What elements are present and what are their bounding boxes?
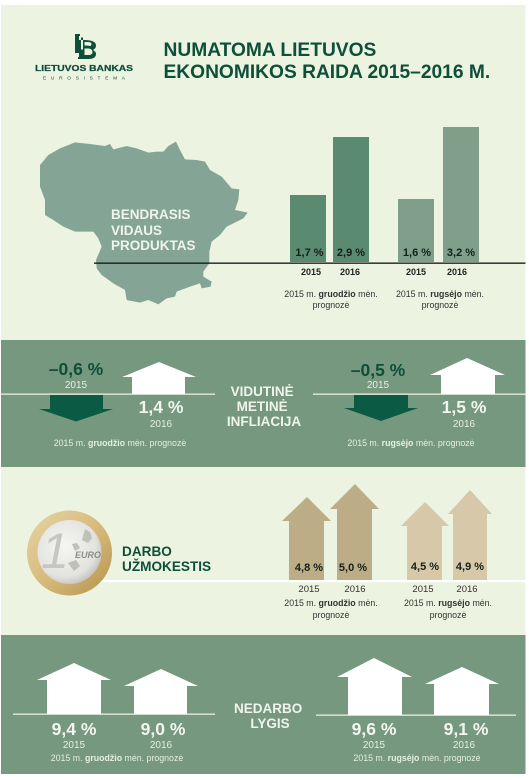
arrow: up 2016 [430, 358, 505, 394]
arrow chart: September forecast: 2016 [456, 584, 478, 595]
bar chart: September forecast: 2016 [447, 267, 467, 277]
September forecast: 2015 m. rugsėjo mėn. prognozė [353, 753, 481, 763]
December forecast: 2015 [63, 740, 86, 751]
December forecast: 2015 m. gruodžio mėn. prognozė [51, 753, 183, 763]
bar chart: December forecast: 2015 [301, 267, 321, 277]
December forecast: –0,6 % [49, 359, 104, 379]
heading: wages: UŽMOKESTIS [122, 559, 211, 574]
arrow: 2015 [337, 658, 412, 715]
September forecast [344, 358, 505, 448]
September forecast: 9,1 % [444, 719, 489, 739]
bar chart: September forecast: 2015 m. rugsėjo mėn. [396, 289, 484, 299]
bar chart: December forecast: 2,9 % [337, 247, 365, 259]
arrow chart: September forecast [401, 490, 492, 620]
arrow chart: December forecast: 2016 [344, 584, 366, 595]
September forecast: 2016 [453, 419, 476, 430]
September forecast: 1,5 % [442, 397, 487, 417]
title: NUMATOMA LIETUVOS [164, 40, 377, 61]
September forecast: 2016 [453, 740, 476, 751]
bar chart: September forecast: 2015 [406, 267, 426, 277]
arrow chart: September forecast: 4,5 % [411, 561, 439, 573]
September forecast: –0,5 % [351, 360, 406, 380]
icon: one euro coin [27, 510, 112, 596]
arrow chart: December forecast: 2015 [298, 584, 320, 595]
bar chart: December forecast: 1,7 % [295, 247, 324, 259]
arrow: 2016 [124, 669, 198, 714]
heading: GDP: BENDRASIS [111, 207, 191, 222]
icon: one euro coin: 1 [41, 523, 69, 579]
heading: unemployment: NEDARBO [234, 701, 302, 716]
panel: bendrasis vidaus produktas [40, 127, 525, 310]
arrow chart: December forecast: 5,0 % [339, 562, 367, 574]
map of Lithuania [40, 142, 248, 304]
panel: vidutinė metinė infliacija [1, 340, 526, 467]
arrow chart: September forecast: 2015 [412, 584, 434, 595]
bar chart: September forecast: 3,2 % [447, 247, 475, 259]
logo: Lietuvos bankas: LIETUVOS BANKAS [35, 63, 133, 73]
arrow: down 2015 [39, 395, 113, 422]
December forecast [37, 663, 198, 763]
arrow chart: December forecast [282, 484, 379, 620]
arrow chart: September forecast: 4,9 % [456, 561, 484, 573]
December forecast: 2015 m. gruodžio mėn. prognozė [54, 438, 186, 448]
panel: nedarbo lygis [1, 635, 526, 774]
bar chart: September forecast: prognozė [422, 300, 458, 310]
bar chart: December forecast: 2015 m. gruodžio mėn. [284, 289, 378, 299]
arrow: 2015 [37, 663, 111, 714]
heading: unemployment: LYGIS [250, 716, 290, 731]
heading: wages: DARBO [122, 544, 172, 559]
December forecast: 9,0 % [141, 719, 186, 739]
bar chart: December forecast: prognozė [313, 300, 349, 310]
arrow chart: December forecast: 2015 m. gruodžio mėn. [284, 598, 378, 608]
December forecast: 1,4 % [139, 397, 184, 417]
logo: Lietuvos bankas: EUROSISTEMA [43, 76, 126, 82]
December forecast: 2016 [150, 740, 173, 751]
September forecast [337, 658, 499, 763]
arrow chart: December forecast: 4,8 % [295, 562, 323, 574]
heading: GDP: PRODUKTAS [111, 238, 196, 253]
arrow chart: December forecast: prognozė [313, 610, 349, 620]
bar chart: December forecast: 2016 [340, 267, 360, 277]
September forecast: 9,6 % [352, 719, 397, 739]
December forecast: 2016 [150, 419, 173, 430]
arrow: 2016 [425, 667, 499, 715]
arrow chart: September forecast: prognozė [430, 610, 466, 620]
December forecast [39, 359, 196, 448]
panel: header [1, 5, 526, 340]
title: EKONOMIKOS RAIDA 2015–2016 M. [164, 62, 490, 83]
heading: inflation: INFLIACIJA [227, 414, 301, 429]
arrow chart: September forecast: 2015 m. rugsėjo mėn. [404, 598, 492, 608]
September forecast: 2015 [367, 380, 390, 391]
bar chart: September forecast [396, 127, 484, 310]
arrow: down 2015 [344, 395, 418, 421]
arrow: up 2016 [122, 362, 196, 394]
September forecast: 2015 m. rugsėjo mėn. prognozė [347, 438, 475, 448]
bar chart: December forecast [284, 137, 378, 310]
panel: darbo užmokestis [1, 467, 526, 635]
heading: inflation: METINĖ [237, 399, 288, 414]
heading: GDP: VIDAUS [111, 223, 162, 238]
December forecast: 2015 [65, 380, 88, 391]
September forecast: 2015 [363, 740, 386, 751]
heading: inflation: VIDUTINĖ [231, 384, 294, 399]
bar chart: September forecast: 1,6 % [403, 247, 431, 259]
icon: one euro coin: EURO [75, 550, 101, 560]
logo: Lietuvos bankas [35, 34, 133, 82]
December forecast: 9,4 % [52, 719, 97, 739]
